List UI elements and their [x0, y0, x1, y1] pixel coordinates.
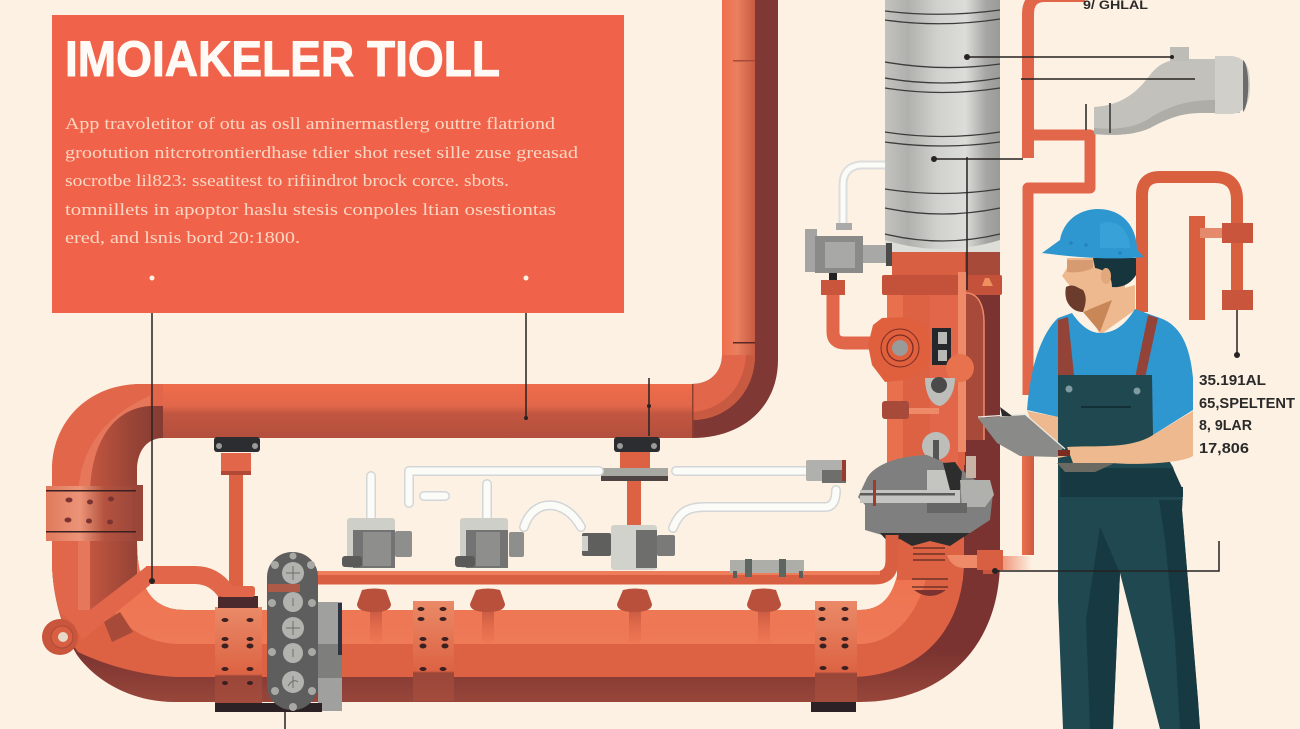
straps	[1058, 317, 1074, 375]
worker	[978, 209, 1200, 729]
arms	[1027, 411, 1068, 458]
left elbow light outer band	[52, 384, 163, 625]
title: IMOIAKELER TIOLL	[65, 31, 500, 87]
body text: socrotbe lil823: sseatitest to rifiindrot brock corce. sbots.	[65, 171, 509, 190]
pump upper left	[805, 165, 892, 343]
grey elbow pipe	[1094, 47, 1250, 135]
shirt	[1027, 309, 1193, 435]
lower riser section	[897, 530, 963, 580]
right side labels: 17,806	[1199, 441, 1249, 457]
callout dots	[149, 54, 1240, 584]
body text: tomnillets in apoptor haslu stesis conpoles ltian osestiontas	[65, 200, 556, 219]
left elbow dark inner	[90, 384, 163, 615]
panel dots	[150, 276, 154, 280]
vertical riser orange column	[882, 250, 1002, 570]
right side labels	[1199, 373, 1295, 457]
upper right elbow orange	[692, 0, 755, 420]
vertical connector centre	[601, 437, 668, 526]
shadow blob under crank	[104, 612, 133, 642]
bib	[1058, 375, 1183, 500]
valve 1	[342, 518, 412, 568]
main pipe network	[52, 0, 1000, 702]
orange info panel	[52, 15, 624, 313]
upper right elbow dark outer	[692, 0, 778, 438]
hard hat	[1042, 209, 1144, 258]
elbow hatch marks and side valve	[912, 548, 1032, 596]
lower U pipe outer shadow	[52, 290, 1000, 702]
callout lines	[152, 57, 1237, 729]
valve 2	[455, 518, 524, 568]
lower pipe orange body	[52, 290, 964, 677]
bracket	[730, 559, 804, 578]
silver cylinder	[885, 0, 1000, 252]
vertical connector left	[214, 437, 260, 597]
legs	[1058, 490, 1200, 729]
body text: ered, and lsnis bord 20:1800.	[65, 228, 300, 247]
face	[1062, 258, 1125, 312]
beard	[1065, 285, 1086, 312]
right side labels: 8, 9LAR	[1199, 418, 1253, 434]
valves row	[342, 460, 846, 578]
gearbox	[858, 455, 994, 546]
pipe flange knobs	[357, 588, 781, 642]
hair	[1093, 258, 1136, 287]
tablet	[978, 415, 1063, 457]
neck	[1083, 285, 1135, 335]
upper horizontal pipe	[163, 384, 692, 438]
right side labels: 35.191AL	[1199, 373, 1266, 389]
thin orange pipes upper right	[1022, 0, 1253, 555]
body text: grootution nitcrotrontierdhase tdier shot reset sille zuse greasad	[65, 143, 579, 162]
lighter inner band of lower pipe	[103, 540, 930, 644]
clamp bands on lower pipe	[46, 485, 857, 712]
left crank arm	[42, 566, 226, 655]
white tubing	[371, 471, 836, 528]
body text: App travoletitor of otu as osll aminermastlerg outtre flatriond	[65, 114, 556, 133]
rotary meter	[262, 552, 342, 712]
right side labels: 65,SPELTENT	[1199, 396, 1295, 412]
lower small branch pipe	[300, 535, 892, 578]
body text	[65, 114, 579, 247]
valve 3	[582, 525, 675, 570]
gauge and valves on riser	[868, 317, 974, 464]
cap right	[806, 460, 846, 483]
